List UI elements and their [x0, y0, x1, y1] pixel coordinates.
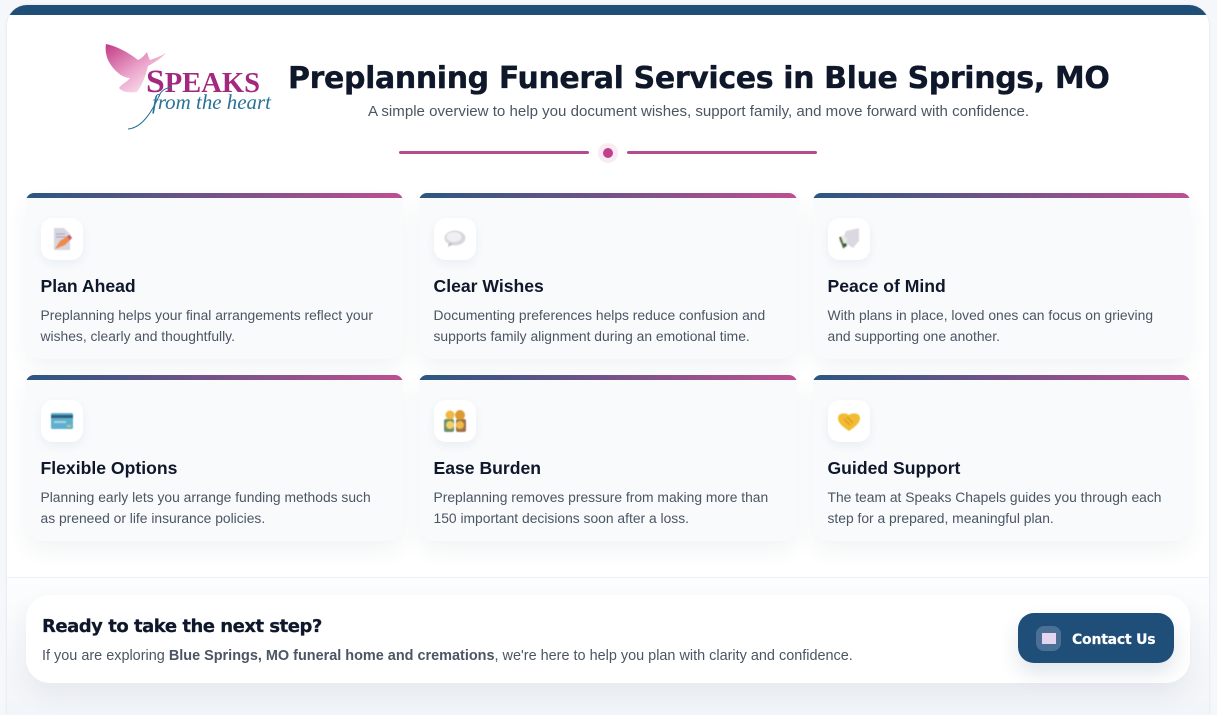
icon: credit card	[41, 400, 83, 442]
text	[828, 489, 1162, 526]
text: With plans in place, loved ones can focus on grieving	[828, 307, 1153, 323]
icon: speech bubble	[434, 218, 476, 260]
heading: Flexible Options	[40, 458, 177, 478]
text: Planning early lets you arrange funding methods such	[40, 489, 371, 505]
text: step for a prepared, meaningful plan.	[828, 510, 1054, 526]
heading: Ease Burden	[434, 458, 541, 478]
panel: call to action	[26, 595, 1190, 683]
divider with dot	[399, 143, 817, 163]
text	[40, 489, 371, 526]
logo tagline: from the heart	[152, 90, 272, 114]
panel: Clear Wishes	[419, 193, 797, 359]
icon: handshake	[828, 400, 870, 442]
logo wordmark: SPEAKS	[146, 64, 260, 100]
button label: Contact Us	[1072, 632, 1155, 648]
text: Documenting preferences helps reduce confusion and	[434, 307, 765, 323]
text: and supporting one another.	[828, 328, 1000, 344]
panel: Flexible Options	[26, 375, 403, 541]
heading: Peace of Mind	[828, 276, 946, 296]
logo: Speaks from the heart	[106, 44, 272, 130]
text: If you are exploring Blue Springs, MO funeral home and cremations, we're here to help you plan with clarity and confidence.	[42, 648, 853, 664]
text: Preplanning removes pressure from making more than	[434, 489, 768, 505]
text	[828, 307, 1153, 344]
panel: Guided Support	[813, 375, 1190, 541]
text: Preplanning helps your final arrangements reflect your	[40, 307, 373, 323]
logo swoosh	[128, 87, 172, 129]
panel: Ease Burden	[419, 375, 797, 541]
heading: Guided Support	[828, 458, 960, 478]
button: Contact Us	[1018, 613, 1174, 663]
icon: envelope	[1036, 626, 1061, 651]
panel: Peace of Mind	[813, 193, 1190, 359]
heading: Ready to take the next step?	[42, 616, 322, 637]
text: as preneed or life insurance policies.	[40, 510, 265, 526]
text	[434, 307, 765, 344]
heading: Plan Ahead	[40, 276, 136, 296]
text: supports family alignment during an emotional time.	[434, 328, 750, 344]
subtitle: A simple overview to help you document wishes, support family, and move forward with confidence.	[368, 103, 1029, 120]
text	[434, 489, 768, 526]
text	[40, 307, 373, 344]
panel: Plan Ahead	[26, 193, 403, 359]
heading: Clear Wishes	[434, 276, 544, 296]
text: 150 important decisions soon after a loss.	[434, 510, 689, 526]
icon: document and pencil	[41, 218, 83, 260]
title: Preplanning Funeral Services in Blue Springs, MO	[288, 61, 1109, 96]
text: wishes, clearly and thoughtfully.	[40, 328, 235, 344]
icon: dove with olive branch	[828, 218, 870, 260]
icon: family	[434, 400, 476, 442]
icon: dove	[106, 44, 166, 92]
text: The team at Speaks Chapels guides you through each	[828, 489, 1162, 505]
